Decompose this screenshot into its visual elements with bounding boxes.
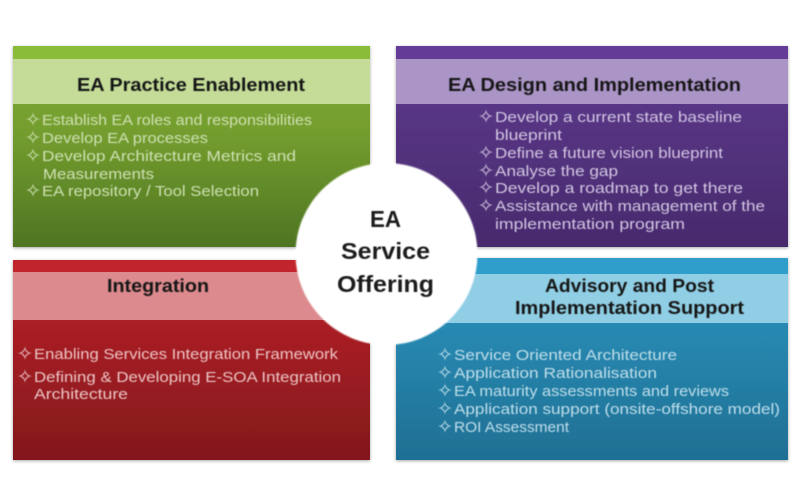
panel: Integration: [13, 260, 370, 460]
list: practice enablement items: ✧: [25, 109, 41, 131]
heading: Advisory and Post Implementation Support: Advisory and Post: [545, 276, 714, 296]
list: advisory items: ✧: [437, 362, 453, 384]
title: EA Service Offering: EA: [370, 206, 401, 232]
list: design and implementation items: Develop a current state baseline: [495, 109, 742, 126]
list: advisory items: ✧: [437, 344, 453, 366]
list: advisory items: ✧: [437, 398, 453, 420]
panel: EA Design and Implementation: [396, 46, 788, 247]
panel: Advisory and Post Implementation Support: [396, 258, 788, 460]
list: integration items: ✧: [17, 343, 33, 365]
list: advisory items: ✧: [437, 380, 453, 402]
list: integration items: [17, 343, 341, 403]
heading: Advisory and Post Implementation Support: [515, 276, 744, 318]
list: advisory items: [437, 344, 780, 438]
list: design and implementation items: Analyse the gap: [495, 163, 618, 180]
heading: Integration: Integration: [107, 276, 209, 296]
list: design and implementation items: ✧: [478, 160, 494, 182]
center circle: EA Service Offering: [296, 163, 478, 345]
title: EA Service Offering: Offering: [337, 271, 434, 297]
list: design and implementation items: ✧: [478, 195, 494, 217]
heading: EA Practice Enablement: EA Practice Enablement: [77, 75, 305, 95]
heading: EA Design and Implementation: EA Design and Implementation: [448, 75, 741, 95]
list: practice enablement items: Develop EA processes: [42, 130, 208, 147]
list: practice enablement items: ✧: [25, 180, 41, 202]
list: practice enablement items: ✧: [25, 127, 41, 149]
list: design and implementation items: [478, 106, 765, 233]
panel: EA Practice Enablement: [13, 46, 370, 247]
list: design and implementation items: ✧: [478, 142, 494, 164]
list: design and implementation items: Define a future vision blueprint: [495, 145, 724, 162]
title: EA Service Offering: [337, 206, 434, 297]
list: integration items: Defining & Developing E-SOA Integration: [34, 369, 341, 386]
list: design and implementation items: implementation program: [495, 216, 685, 233]
list: advisory items: Application support (onsite-offshore model): [454, 401, 780, 418]
list: design and implementation items: ✧: [478, 106, 494, 128]
list: design and implementation items: blueprint: [495, 127, 563, 144]
list: advisory items: Application Rationalisation: [454, 365, 657, 382]
heading: Advisory and Post Implementation Support: Implementation Support: [515, 298, 744, 318]
list: design and implementation items: Develop a roadmap to get there: [495, 180, 743, 197]
list: practice enablement items: Measurements: [43, 166, 154, 183]
list: integration items: ✧: [17, 366, 33, 388]
title: EA Service Offering: Service: [341, 238, 430, 264]
list: advisory items: EA maturity assessments and reviews: [454, 383, 729, 400]
list: practice enablement items: ✧: [25, 145, 41, 167]
list: design and implementation items: Assistance with management of the: [495, 198, 765, 215]
list: advisory items: Service Oriented Architecture: [454, 347, 677, 364]
list: practice enablement items: EA repository / Tool Selection: [42, 183, 259, 200]
list: practice enablement items: Establish EA roles and responsibilities: [42, 112, 312, 129]
list: integration items: Architecture: [34, 386, 128, 403]
list: practice enablement items: Develop Architecture Metrics and: [42, 148, 296, 165]
list: practice enablement items: [25, 109, 312, 202]
list: integration items: Enabling Services Integration Framework: [34, 346, 339, 363]
list: advisory items: ✧: [437, 416, 453, 438]
list: design and implementation items: ✧: [478, 177, 494, 199]
list: advisory items: ROI Assessment: [454, 419, 570, 436]
